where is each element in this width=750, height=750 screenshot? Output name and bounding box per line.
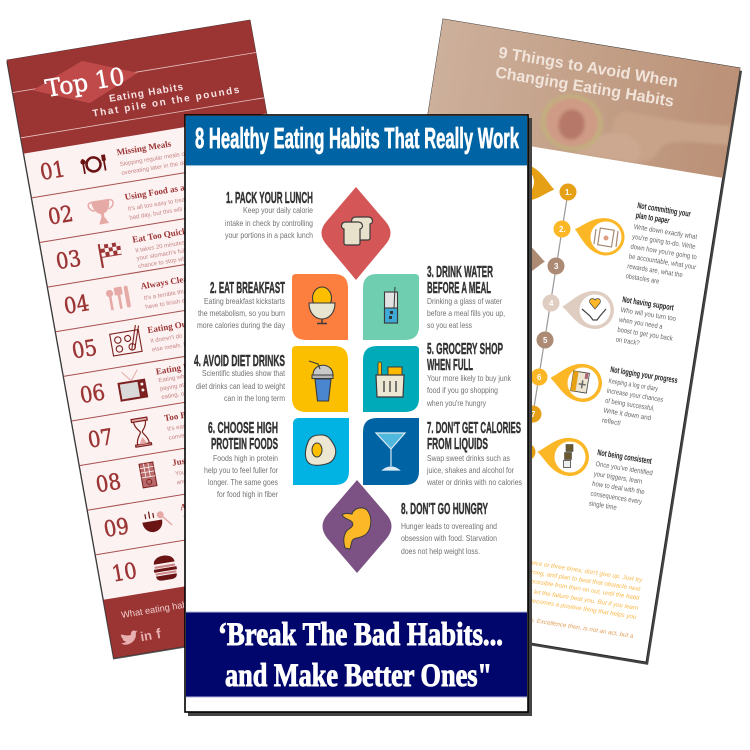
text block: Not being consistent: single time xyxy=(588,500,617,512)
row 06 xyxy=(64,342,315,421)
text block: Not committing your plan to paper: obstacles are xyxy=(625,273,660,286)
row 09: 09 xyxy=(102,514,131,543)
row 04 xyxy=(49,256,299,332)
tile: diet drink cup xyxy=(292,346,348,412)
tile: martini glass xyxy=(363,418,419,485)
habit 7 text: juice, shakes and alcohol for xyxy=(426,465,514,475)
habit 5 text: food if you go shopping xyxy=(427,385,498,395)
row 05: else meals. Food served out is big xyxy=(152,333,242,354)
habit 2 text xyxy=(197,280,286,330)
tile: glass of water xyxy=(363,274,419,340)
row 07: 07 xyxy=(86,425,115,454)
title: Changing Eating Habits xyxy=(494,63,675,111)
row 02 xyxy=(33,167,283,243)
row 08 xyxy=(81,433,330,510)
row 04: It's a terrible thing to waste food, but you xyxy=(143,279,250,302)
subheading: Eating Habits xyxy=(108,82,184,105)
habit 8 text: Hunger leads to overeating and xyxy=(401,521,497,531)
title xyxy=(494,44,679,111)
timeline node 6: 6 xyxy=(537,373,542,382)
quote banner: ‘Break The Bad Habits... xyxy=(218,617,503,653)
habit 3 text: 3. DRINK WATER xyxy=(427,264,493,281)
text block: Not being consistent: your triggers, learn xyxy=(593,471,643,486)
row 07: convenient big portions xyxy=(168,426,230,442)
row 03 xyxy=(41,210,291,287)
timeline node 7 xyxy=(524,406,542,422)
habit 7 text: water or drinks with no calories xyxy=(426,477,522,487)
row 02: bad day, but this will only make it worse xyxy=(129,199,234,222)
row 03: chance to stop when you're full xyxy=(138,251,220,270)
habit 2 text: the metabolism, so you burn xyxy=(198,308,285,318)
timeline node 2 xyxy=(554,220,570,238)
closing advice text: sticks. Don't let the failure beat you. But if you learn xyxy=(499,583,639,612)
habit 7 text xyxy=(426,420,522,487)
row 02: It's all too easy to treat yourself after a xyxy=(127,190,229,213)
text block: Not having support xyxy=(614,294,679,353)
row 05: Eating Out Too Much xyxy=(147,312,231,335)
row 10 xyxy=(109,536,258,589)
habit 2 text: Eating breakfast kickstarts xyxy=(204,296,285,306)
timeline node 4 xyxy=(542,294,560,312)
text block: Not logging your progress: Keeping a log or diary xyxy=(608,378,659,393)
pointer 4 with heart and hands icon xyxy=(560,288,616,331)
habit 3 text xyxy=(427,264,505,330)
closing advice text: We are what we repeatedly do. Excellence then, is not an act, but a xyxy=(450,604,634,640)
header photo of a fig in a hand xyxy=(426,19,740,178)
habit 5 text: when you're hungry xyxy=(426,398,487,408)
timeline node 4: 4 xyxy=(549,299,554,308)
tile: grocery basket xyxy=(363,346,419,412)
row 09 xyxy=(89,477,338,555)
text block: Not being consistent: Not being consistent xyxy=(597,447,653,466)
habit 6 text: PROTEIN FOODS xyxy=(211,436,278,453)
row 02: 02 xyxy=(46,202,75,231)
title bar xyxy=(186,116,527,166)
habit 5 text: WHEN FULL xyxy=(427,357,473,374)
habit 6 text: help you to feel fuller for xyxy=(204,465,278,475)
habit 1 text: 1. PACK YOUR LUNCH xyxy=(226,190,313,207)
timeline node 3: 3 xyxy=(554,262,559,271)
text block: Not committing your plan to paper: plan to paper xyxy=(635,210,671,225)
row 01: Skipping regular meals often leads to xyxy=(119,146,218,168)
timeline node 1: 1. xyxy=(565,188,572,197)
row 07: It's easy to eat too much from xyxy=(167,414,245,433)
footer band: in xyxy=(139,628,153,644)
diamond: pack your lunch with bread icon xyxy=(322,187,390,280)
habit 3 text: before a meal fills you up, xyxy=(427,308,505,318)
panel: 9 things to avoid sheet (right, tilted) xyxy=(428,18,742,665)
row 06: Eating while watching TV means xyxy=(158,364,244,384)
row 05: 05 xyxy=(70,336,99,364)
heading: Top 10: Top 10 xyxy=(43,62,127,103)
habit 6 text: longer. The same goes xyxy=(208,477,278,487)
timeline node 2: 2. xyxy=(559,225,566,234)
row 06: 06 xyxy=(78,380,107,409)
closing advice text: again, look at what went wrong, and plan to beat that obstacle next xyxy=(459,557,641,593)
title: 9 Things to Avoid When xyxy=(497,44,679,91)
tile: egg cup xyxy=(292,274,348,340)
timeline node 1 xyxy=(560,184,576,200)
habit 3 text: BEFORE A MEAL xyxy=(427,280,491,297)
header band xyxy=(7,20,267,154)
habit 4 text: 4. AVOID DIET DRINKS xyxy=(194,353,285,370)
text block: Not committing your plan to paper: down how you're going to xyxy=(630,244,697,261)
text block: Not committing your plan to paper xyxy=(625,200,706,291)
text block: Not being consistent: how to deal with the xyxy=(592,481,645,496)
habit 1 text xyxy=(225,190,313,240)
tile: fried egg xyxy=(293,418,349,485)
habit 8 text xyxy=(401,501,497,556)
habit 7 text: FROM LIQUIDS xyxy=(427,436,488,453)
text block: Not having support: when you need a xyxy=(618,317,663,331)
panel: Top 10 eating habits sheet (left, tilted) xyxy=(6,20,357,660)
row 05: It doesn't do any harm to let someone xyxy=(150,323,250,345)
habit 4 text: Scientific studies show that xyxy=(202,368,286,378)
text block: Not logging your progress: increase your chances xyxy=(606,388,664,404)
text block: Not having support: boost to get you back xyxy=(617,327,674,343)
pointer 3 xyxy=(488,236,547,282)
row 01: overeating later in the day xyxy=(121,160,190,177)
habit 8 text: obsession with food. Starvation xyxy=(401,533,497,543)
habit 3 text: so you eat less xyxy=(427,320,472,330)
habit 1 text: your portions in a pack lunch xyxy=(225,230,313,240)
row 03: 03 xyxy=(54,246,83,275)
habit 6 text: for food high in fiber xyxy=(217,489,278,499)
habit 1 text: intake in check by controlling xyxy=(225,218,313,228)
footer band: f xyxy=(155,625,162,642)
text block: Not logging your progress: Not logging your progress xyxy=(610,364,679,385)
row 10: Smaller meals are better xyxy=(191,550,256,567)
panel: 8 healthy eating habits sheet (centre) xyxy=(185,115,532,716)
row 09: Toppings and sauces xyxy=(183,507,239,522)
row 03: your stomach's full, so slow down for a xyxy=(136,240,239,262)
row 04: 04 xyxy=(62,291,91,320)
habit 5 text: 5. GROCERY SHOP xyxy=(427,341,503,358)
timeline node 7: 7 xyxy=(531,410,536,419)
closing advice text xyxy=(450,555,644,640)
row 08: and still stay on track xyxy=(176,471,232,486)
timeline node 8 xyxy=(518,444,536,460)
closing advice text: from it, failure becomes a positive thing that helps you xyxy=(490,591,637,621)
habit 8 text: does not help weight loss. xyxy=(401,546,480,556)
habit 7 text: Swap sweet drinks such as xyxy=(427,453,510,463)
diamond: don't go hungry with stomach icon xyxy=(322,480,392,573)
row 09: Adding Extras xyxy=(179,493,237,512)
text block: Not being consistent: consequences every xyxy=(590,491,643,506)
habit 2 text: more calories during the day xyxy=(197,320,286,330)
text block: Not having support: Not having support xyxy=(622,294,675,312)
row 01 xyxy=(25,122,275,198)
habit 4 text: diet drinks can lead to weight xyxy=(196,381,286,391)
text block: Not committing your plan to paper: be accountable, what your xyxy=(628,253,697,271)
text block: Not having support: Who will you turn too xyxy=(620,307,677,323)
row 03: Eat Too Quickly xyxy=(131,225,195,245)
habit 2 text: 2. EAT BREAKFAST xyxy=(210,280,285,297)
habit 1 text: Keep your daily calorie xyxy=(243,205,313,215)
text block: Not committing your plan to paper: rewards are, what the xyxy=(627,263,683,279)
text block: Not logging your progress xyxy=(601,364,679,435)
pointer 2 with plate icon xyxy=(570,211,628,259)
row 04: Always Clean Your Plate xyxy=(140,266,235,291)
row 01: Missing Meals xyxy=(116,139,172,157)
row 04: have to finish everything xyxy=(145,294,210,311)
habit 4 text: can in the long term xyxy=(224,393,285,403)
row 08: Just One Treat xyxy=(171,449,229,468)
text block: Not being consistent: Once you've identified xyxy=(595,461,653,477)
title bar: 8 Healthy Eating Habits That Really Work xyxy=(195,123,519,155)
pointer 1 xyxy=(496,159,558,208)
text block: Not committing your plan to paper: Not committing your xyxy=(637,200,692,219)
subheading: That pile on the pounds xyxy=(92,85,241,120)
quote banner: and Make Better Ones" xyxy=(225,658,492,694)
habit 5 text: Your more likely to buy junk xyxy=(427,373,512,383)
text block: Not having support: on track? xyxy=(615,337,640,347)
text block: Not logging your progress: of being successful. xyxy=(605,398,655,413)
timeline spine xyxy=(527,192,568,452)
quote banner xyxy=(186,612,527,698)
row 03: It takes 20 minutes for your brain to register xyxy=(135,230,250,254)
timeline node 3 xyxy=(548,258,564,274)
text block: Not committing your plan to paper: you're going to-do. Write xyxy=(632,234,696,251)
text block: Not committing your plan to paper: Write down exactly what xyxy=(633,224,698,241)
habit 3 text: Drinking a glass of water xyxy=(427,296,502,306)
row 02: Using Food as a Reward xyxy=(124,177,218,202)
habit 6 text: 6. CHOOSE HIGH xyxy=(208,420,278,437)
habit 5 text xyxy=(426,341,512,408)
panel: 8 healthy eating habits sheet (centre): 7. DON'T GET CALORIES xyxy=(427,420,521,437)
text block: Not logging your progress: Write it down and xyxy=(603,408,652,422)
text block: Not logging your progress: reflect! xyxy=(601,417,621,427)
row 10: Eating Big Meals xyxy=(187,536,254,557)
row 07: Too Big Portions xyxy=(163,403,229,423)
habit 4 text xyxy=(194,353,286,403)
footer band xyxy=(103,560,357,658)
habit 8 text: 8. DON'T GO HUNGRY xyxy=(401,501,488,518)
row 07 xyxy=(73,388,323,466)
row 01: 01 xyxy=(38,157,67,186)
text block: Not being consistent xyxy=(588,447,656,517)
pointer 8 with checkbox icon xyxy=(534,433,592,479)
row 10: 10 xyxy=(110,559,139,588)
row 05 xyxy=(57,298,307,376)
row 06: paying attention to it, not what you xyxy=(160,372,250,393)
timeline node 5: 5 xyxy=(543,336,548,345)
footer band: What eating habits will you change? xyxy=(120,586,267,620)
pointer 6 with log book icon xyxy=(547,359,605,405)
closing advice text: time. Make it as hard as possible from then on out, until the habit xyxy=(464,567,640,602)
habit 6 text xyxy=(204,420,278,499)
row 08: 08 xyxy=(94,470,123,498)
timeline node 6 xyxy=(530,368,548,386)
row 06: eating, or how much xyxy=(161,386,215,401)
row 06: Eating In Front of TV xyxy=(155,353,241,377)
timeline node 5 xyxy=(536,332,554,348)
closing advice text: If you fail twice or three times, don't give up. Just try xyxy=(502,555,644,584)
habit 6 text: Foods high in protein xyxy=(213,453,278,463)
row 08: You can have a small treat xyxy=(175,460,245,477)
